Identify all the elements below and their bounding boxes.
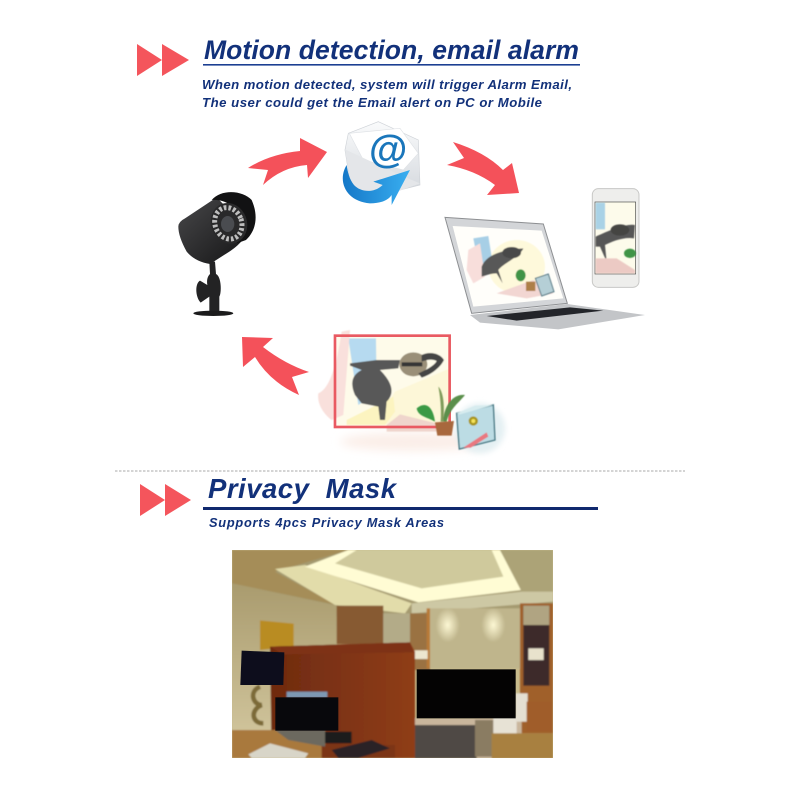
section divider [115, 470, 685, 472]
illustration: intruder scene [318, 330, 505, 453]
arrow: email to laptop [447, 142, 519, 195]
camera LED ring [210, 204, 246, 243]
curtain [337, 606, 383, 644]
privacy mask: monitor [275, 697, 338, 731]
partition [270, 642, 415, 758]
heading underline [203, 64, 580, 66]
description text: The user could get the Email alert on PC or Mobile [202, 95, 542, 110]
intruder figure [350, 360, 400, 420]
heading: Privacy Mask: Privacy Mask [208, 473, 398, 504]
left wall [232, 583, 337, 732]
camera mount stand [196, 262, 221, 311]
camera body [178, 197, 248, 264]
section 2 marker: double red arrows [140, 484, 191, 516]
icon: at sign: @ [369, 128, 407, 172]
description text: When motion detected, system will trigger Alarm Email, [202, 77, 572, 92]
safe box [457, 405, 495, 449]
wall painting [260, 620, 294, 650]
arrow: camera to email [248, 138, 327, 185]
privacy mask: bed [417, 669, 516, 718]
laptop screen picture [467, 236, 554, 298]
red detection frame [335, 336, 450, 427]
bed and floor [415, 718, 522, 758]
ceiling [232, 550, 553, 617]
section 1 marker: double red arrows [137, 44, 189, 76]
description text [202, 77, 572, 110]
camera sun shield [212, 192, 256, 243]
camera lens [221, 216, 234, 232]
icon: smartphone with alert picture [592, 189, 639, 287]
plant [417, 387, 495, 449]
lamp shade [240, 651, 284, 685]
photo: hotel room with privacy masks [232, 550, 553, 758]
desk [232, 730, 325, 758]
description: privacy mask areas: Supports 4pcs Privacy Mask Areas [209, 515, 444, 530]
lamp base [253, 687, 263, 723]
heading: Motion detection, email alarm: Motion detection, email alarm [204, 35, 579, 65]
arrow: intruder scene to camera [242, 337, 309, 395]
icon: email envelope with @ [343, 122, 420, 205]
icon: bullet security camera [178, 192, 256, 316]
heading underline [203, 507, 598, 510]
headboard wall [410, 613, 430, 670]
icon: circling blue arrow [343, 165, 410, 205]
icon: laptop with alert picture [445, 217, 645, 329]
camera front face [205, 198, 253, 249]
scene backdrop [340, 432, 493, 451]
